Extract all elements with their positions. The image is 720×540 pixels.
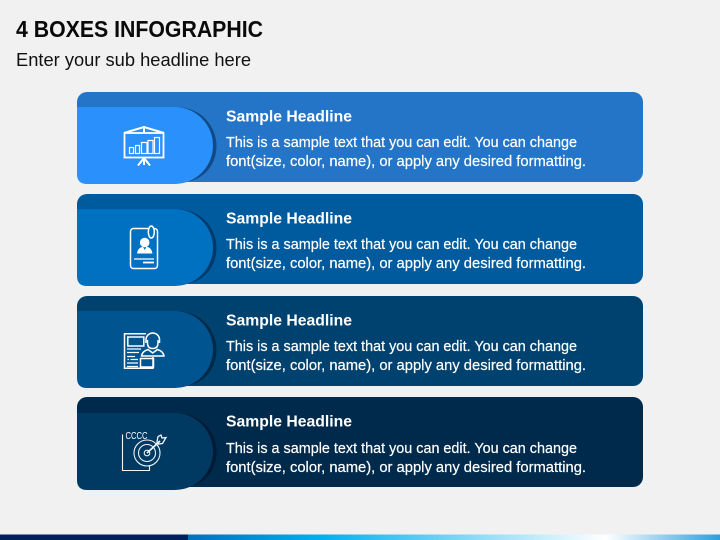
icon: document and support agent	[124, 333, 164, 368]
panel: box 2	[77, 194, 643, 286]
panel: box 3	[77, 296, 643, 388]
panel: box 1	[77, 92, 643, 184]
body text 4	[226, 441, 586, 476]
body text 2: font(size, color, name), or apply any desired formatting.	[226, 256, 586, 272]
body text 3: This is a sample text that you can edit. You can change	[226, 339, 577, 355]
icon: ID card with clip	[130, 226, 158, 268]
body text 3	[226, 339, 586, 374]
icon: presentation board	[124, 126, 164, 166]
body text 1: font(size, color, name), or apply any desired formatting.	[226, 154, 586, 170]
body text 1: This is a sample text that you can edit. You can change	[226, 135, 577, 151]
body text 1	[226, 135, 586, 170]
icon: target and arrow	[122, 431, 166, 470]
headline 2: Sample Headline	[226, 210, 352, 228]
subtitle: Enter your sub headline here	[16, 50, 251, 70]
headline 1: Sample Headline	[226, 108, 352, 126]
body text 3: font(size, color, name), or apply any desired formatting.	[226, 358, 586, 374]
body text 4: This is a sample text that you can edit. You can change	[226, 441, 577, 457]
headline 3: Sample Headline	[226, 312, 352, 330]
footer bar	[0, 534, 720, 540]
body text 4: font(size, color, name), or apply any desired formatting.	[226, 460, 586, 476]
panel: box 4	[77, 397, 643, 490]
headline 4: Sample Headline	[226, 414, 352, 430]
title: 4 BOXES INFOGRAPHIC	[16, 16, 263, 42]
icon: target and arrow: CCCC	[126, 431, 148, 442]
body text 2: This is a sample text that you can edit. You can change	[226, 237, 577, 253]
body text 2	[226, 237, 586, 272]
